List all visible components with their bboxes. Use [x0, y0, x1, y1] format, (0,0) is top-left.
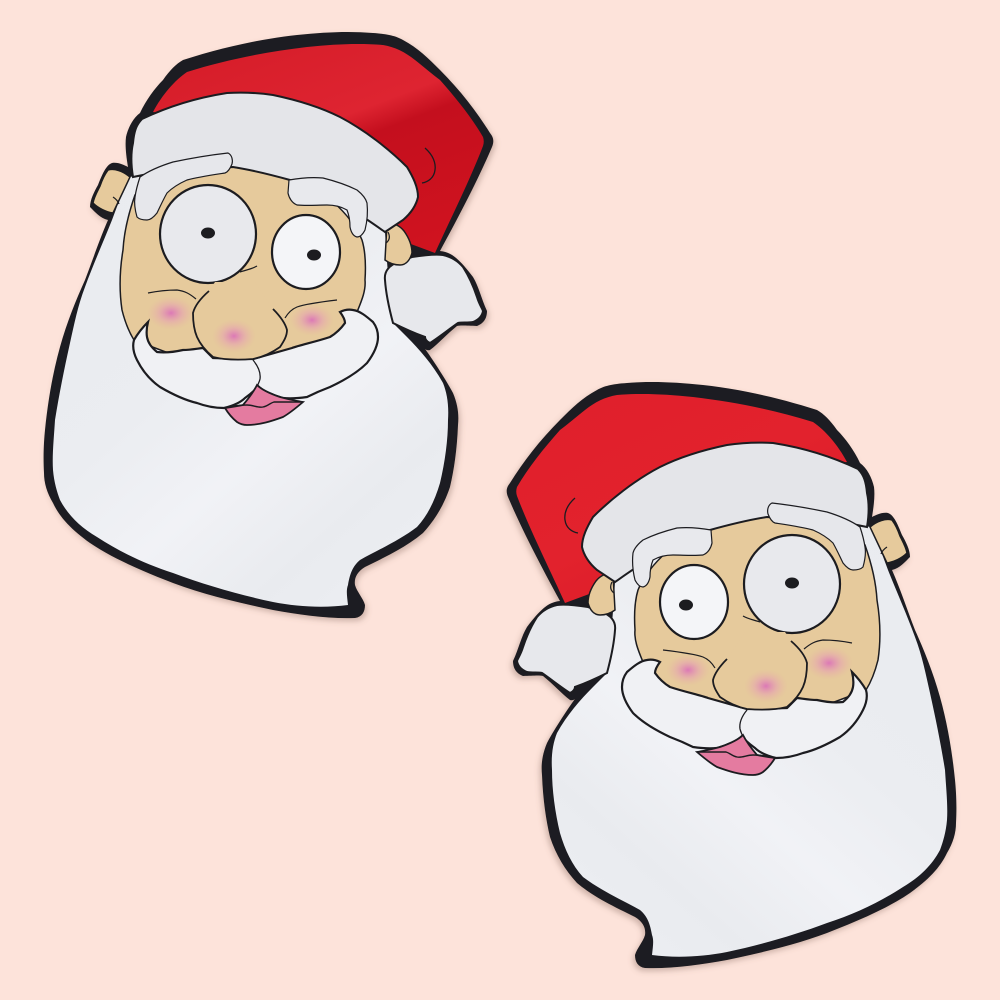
left pupil [201, 228, 215, 238]
lip line [697, 752, 775, 758]
moustache [622, 660, 867, 758]
inner ear [588, 573, 615, 615]
moustache centre line [740, 710, 747, 738]
right cheek blush [290, 304, 334, 336]
beard [552, 520, 947, 957]
left eyebrow [135, 153, 232, 220]
right eyebrow [288, 178, 367, 237]
black outline silhouette [44, 32, 493, 618]
santa face: lower right (mirrored) [507, 382, 956, 968]
nose [713, 632, 807, 710]
pompom [517, 605, 615, 693]
black outline silhouette [507, 382, 956, 968]
hat [153, 44, 484, 253]
nose [193, 282, 287, 360]
lip line [225, 402, 303, 408]
inner eyebrow [633, 528, 712, 587]
right ear [385, 223, 412, 265]
face skin [120, 167, 365, 365]
hat brim [582, 443, 868, 582]
mouth [225, 385, 303, 425]
outer cheek blush [805, 646, 853, 680]
small eye pupil [679, 600, 693, 610]
nose blush [744, 669, 788, 703]
small eye [660, 565, 728, 639]
inner cheek blush [666, 654, 710, 686]
outer eyebrow [768, 503, 865, 570]
right pupil [307, 250, 321, 260]
face skin [635, 517, 880, 715]
pompom [385, 255, 483, 343]
outer ear [870, 519, 907, 563]
hat fold crease [565, 498, 578, 533]
cheek and nose crease lines [611, 547, 887, 668]
mouth [697, 735, 775, 775]
santa face: upper left [44, 32, 493, 618]
hat brim [132, 93, 418, 232]
left cheek blush [147, 296, 195, 330]
big eye pupil [785, 578, 799, 588]
small eye [272, 215, 340, 289]
cheek and nose crease lines [113, 197, 389, 318]
hat fold crease [422, 148, 435, 183]
big eye [160, 185, 256, 283]
left ear [93, 169, 130, 213]
hat [516, 394, 847, 603]
big eye [744, 535, 840, 633]
nose blush [212, 319, 256, 353]
beard [53, 170, 448, 607]
moustache centre line [253, 360, 260, 388]
moustache [133, 310, 378, 408]
